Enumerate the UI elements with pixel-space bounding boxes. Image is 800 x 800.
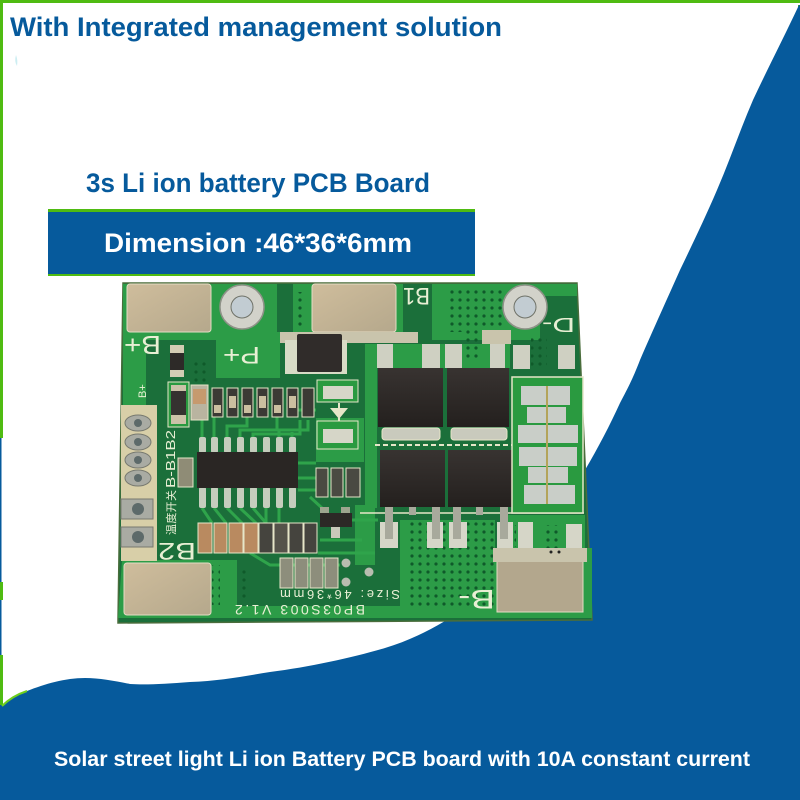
row of small components top (191, 385, 314, 420)
swoosh green highlight on left curve (2, 691, 27, 706)
connector strip (121, 405, 157, 561)
solder pad top left (127, 284, 211, 332)
bright green copper zones (118, 284, 592, 618)
resistor 102 (168, 382, 189, 427)
MOSFET bottom pads and leads (360, 507, 584, 548)
small capacitors beside IC (178, 458, 360, 497)
silkscreen labels: D- (542, 313, 575, 335)
solder block array (512, 377, 583, 513)
silkscreen strips (280, 330, 511, 344)
mounting hole right (503, 285, 547, 329)
PCB board photo illustration (118, 282, 592, 623)
small diode (170, 345, 184, 377)
MOSFET bottom right (448, 450, 514, 507)
silkscreen labels: B2 (158, 537, 196, 564)
MOSFET heat tabs (382, 428, 507, 440)
silkscreen labels: B1 (403, 282, 430, 309)
diode black package (285, 334, 347, 374)
small transistor (320, 507, 352, 538)
silkscreen labels: B- (458, 584, 495, 614)
silkscreen labels: B+ (124, 330, 161, 360)
diode pads and arrow mark (317, 380, 358, 449)
subtitle: 3s Li ion battery PCB Board (86, 168, 430, 198)
MOSFET top right (447, 368, 509, 427)
silkscreen labels: B-B1B2 (163, 430, 178, 488)
silkscreen labels: 温度开关 (164, 490, 178, 535)
solder pad B minus (493, 548, 587, 612)
MOSFET top tabs (377, 344, 575, 369)
MOSFET bottom left (380, 450, 445, 507)
title: With Integrated management solution (10, 12, 502, 42)
board substrate (118, 283, 592, 623)
silkscreen labels: BP03S003 V1.2 (235, 602, 365, 618)
row of small components bottom (198, 523, 317, 553)
solder pad top middle (312, 284, 396, 332)
dimension banner: Dimension :46*36*6mm (104, 228, 412, 258)
board dashed divider (375, 444, 512, 446)
silkscreen labels: Size: 46*36mm (280, 587, 400, 602)
silkscreen labels (124, 282, 575, 618)
bright traces (202, 410, 378, 565)
dimension banner (48, 209, 475, 276)
mounting hole left (220, 285, 264, 329)
silkscreen labels: P+ (223, 341, 260, 368)
control IC with pins (197, 437, 298, 508)
component group lower (280, 558, 374, 588)
bottom caption: Solar street light Li ion Battery PCB board with 10A constant current (54, 748, 750, 771)
via dot fields (192, 288, 561, 608)
MOSFET top left (378, 368, 443, 427)
silkscreen labels: B+ (137, 384, 149, 398)
solder pad bottom left (124, 563, 211, 615)
